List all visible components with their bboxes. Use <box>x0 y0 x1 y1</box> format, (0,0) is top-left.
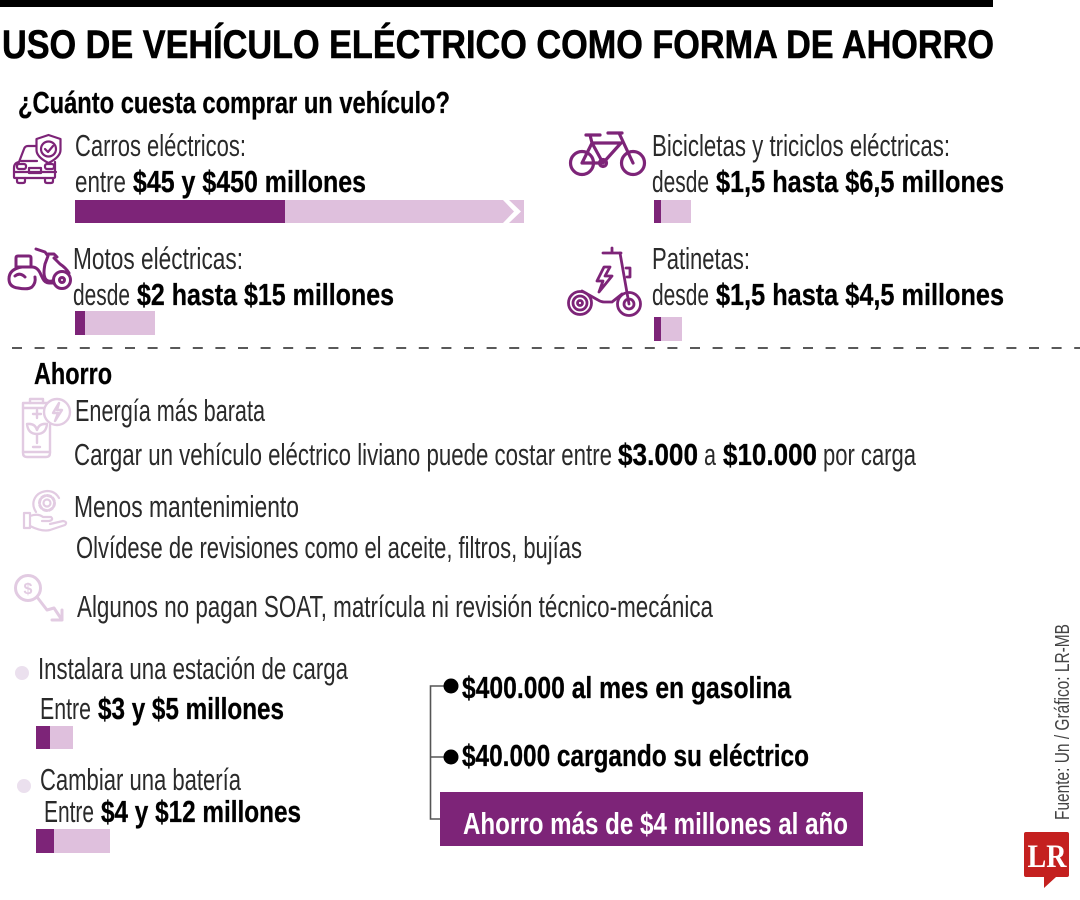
icon: battery phone with bolt <box>23 399 70 457</box>
description: cheaper energy: por carga <box>823 437 917 472</box>
label: kick scooters: Patinetas: <box>652 241 750 276</box>
value: battery change <box>44 794 301 829</box>
value: charging station: $3 y $5 millones <box>98 691 284 726</box>
panel: less maintenance <box>24 489 582 565</box>
label: cars: Carros eléctricos: <box>75 128 246 163</box>
value: cars: entre <box>75 164 126 199</box>
description: cheaper energy: a <box>704 437 717 472</box>
heading: savings: Ahorro <box>34 356 112 391</box>
bullet: charging <box>444 750 458 764</box>
description: cheaper energy: Cargar un vehículo eléctrico liviano puede costar entre <box>74 437 612 472</box>
value: motorcycles <box>73 277 394 312</box>
callout: annual savings: Ahorro más de $4 millones al año <box>463 806 848 841</box>
source credit: Fuente: Un / Gráfico: LR-MB <box>1052 624 1074 820</box>
value: kick scooters: desde <box>652 277 709 312</box>
logo: LR: LR <box>1028 839 1067 875</box>
panel: electric motorcycles <box>9 241 394 335</box>
label: less maintenance: Menos mantenimiento <box>74 489 299 524</box>
description: cheaper energy: $10.000 <box>723 437 817 472</box>
panel: electric bicycles <box>570 128 1004 223</box>
icon: bicycle <box>570 133 644 174</box>
icon: scooter <box>9 249 70 289</box>
panel: electric cars <box>14 128 524 223</box>
panel: exemptions <box>16 576 714 624</box>
value: motorcycles: desde <box>73 277 130 312</box>
panel: charging station <box>15 651 349 749</box>
value: motorcycles: $2 hasta $15 millones <box>137 277 394 312</box>
heading: purchase cost: ¿Cuánto cuesta comprar un vehículo? <box>18 85 450 120</box>
value: kick scooters <box>652 277 1004 312</box>
icon: hand with gear <box>24 491 66 530</box>
callout: annual savings <box>440 792 863 846</box>
text: gasoline cost: $400.000 al mes en gasolina <box>462 670 792 705</box>
bar: battery change <box>36 829 110 853</box>
bullet: charging station <box>15 666 29 680</box>
bar: cars <box>75 200 524 223</box>
value: bicycles <box>652 164 1004 199</box>
value: battery change: $4 y $12 millones <box>101 794 301 829</box>
description: cheaper energy: $3.000 <box>618 437 698 472</box>
bar: charging station <box>36 726 73 749</box>
value: battery change: Entre <box>44 794 94 829</box>
value: kick scooters: $1,5 hasta $4,5 millones <box>716 277 1004 312</box>
bar: kick scooters <box>654 317 682 341</box>
description: less maintenance: Olvídese de revisiones como el aceite, filtros, bujías <box>76 530 582 565</box>
icon: falling money <box>16 576 62 620</box>
value: charging station: Entre <box>40 691 91 726</box>
connector lines <box>430 686 445 819</box>
value: charging station <box>40 691 284 726</box>
value: cars: $45 y $450 millones <box>133 164 366 199</box>
label: battery change: Cambiar una batería <box>40 762 242 797</box>
value: cars <box>75 164 366 199</box>
label: bicycles: Bicicletas y triciclos eléctricas: <box>652 128 950 163</box>
panel: cheaper energy <box>23 393 917 472</box>
panel: electric kick scooters <box>568 241 1004 341</box>
label: motorcycles: Motos eléctricas: <box>73 241 243 276</box>
panel: annual savings calculation <box>430 670 863 846</box>
logo: LR <box>1024 832 1069 888</box>
icon label: dollar sign: $ <box>24 581 33 598</box>
icon: car with shield <box>14 135 60 183</box>
panel: battery change <box>17 762 301 853</box>
icon: kick scooter <box>568 248 640 316</box>
text: charging cost: $40.000 cargando su eléctrico <box>462 738 809 773</box>
bar: bicycles <box>654 200 691 223</box>
value: bicycles: $1,5 hasta $6,5 millones <box>716 164 1004 199</box>
value: bicycles: desde <box>652 164 709 199</box>
label: cheaper energy: Energía más barata <box>75 393 266 428</box>
label: charging station: Instalara una estación de carga <box>38 651 349 686</box>
description: exemptions: Algunos no pagan SOAT, matrícula ni revisión técnico-mecánica <box>77 589 714 624</box>
bullet: battery change <box>17 779 31 793</box>
bullet: gasoline <box>444 678 458 694</box>
bar: motorcycles <box>75 311 155 335</box>
